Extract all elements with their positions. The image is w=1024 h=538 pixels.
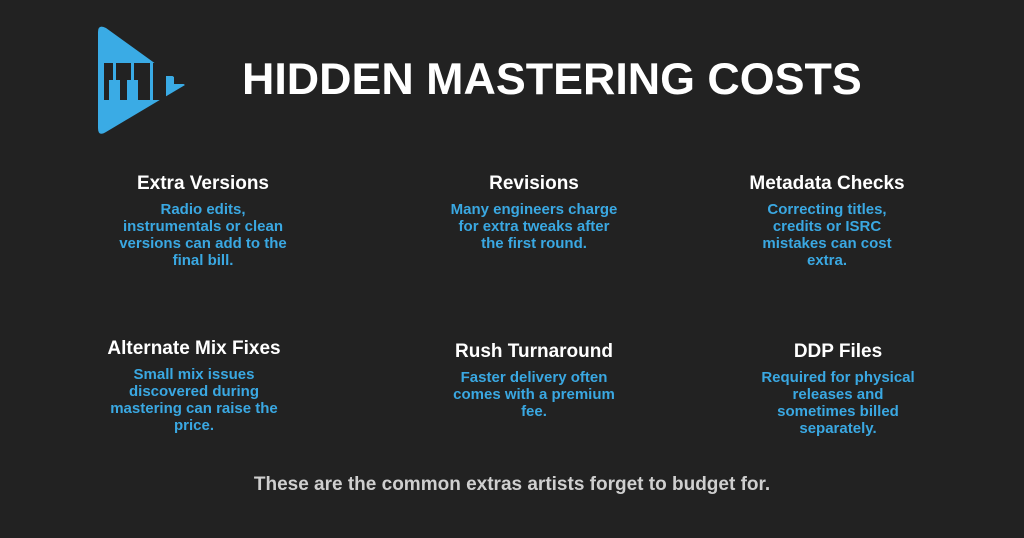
panel: alternate mix fixes: Alternate Mix Fixes <box>107 338 281 359</box>
panel: metadata checks: Correcting titles, <box>767 201 887 218</box>
panel: extra versions <box>119 173 287 269</box>
panel: ddp files <box>761 341 915 437</box>
panel: ddp files: sometimes billed <box>777 403 899 420</box>
panel: extra versions: final bill. <box>173 252 233 269</box>
panel: alternate mix fixes: mastering can raise the <box>110 400 278 417</box>
panel: rush turnaround: Faster delivery often <box>461 369 607 386</box>
panel: metadata checks <box>749 173 905 269</box>
panel: metadata checks: extra. <box>807 252 847 269</box>
panel: ddp files: releases and <box>793 386 883 403</box>
panel: revisions: Many engineers charge <box>451 201 617 218</box>
panel: extra versions: Radio edits, <box>160 201 246 218</box>
panel: alternate mix fixes: Small mix issues <box>134 366 254 383</box>
panel: rush turnaround: Rush Turnaround <box>455 341 613 362</box>
panel: metadata checks: Metadata Checks <box>749 173 905 194</box>
panel: rush turnaround: comes with a premium <box>453 386 615 403</box>
logo <box>98 26 185 134</box>
panel: revisions: for extra tweaks after <box>459 218 609 235</box>
panel: extra versions: instrumentals or clean <box>123 218 283 235</box>
panel: revisions: Revisions <box>489 173 579 194</box>
panel: alternate mix fixes: discovered during <box>129 383 259 400</box>
panel: revisions <box>451 173 617 252</box>
panel: ddp files: DDP Files <box>794 341 882 362</box>
panel: metadata checks: mistakes can cost <box>762 235 892 252</box>
panel: rush turnaround: fee. <box>521 403 547 420</box>
panel: revisions: the first round. <box>481 235 587 252</box>
panel: alternate mix fixes: price. <box>174 417 214 434</box>
panel: extra versions: Extra Versions <box>137 173 269 194</box>
panel: ddp files: Required for physical <box>761 369 915 386</box>
footer: These are the common extras artists forget to budget for. <box>254 474 770 495</box>
panel: extra versions: versions can add to the <box>119 235 287 252</box>
title: HIDDEN MASTERING COSTS <box>242 54 862 104</box>
panel: metadata checks: credits or ISRC <box>773 218 881 235</box>
panel: rush turnaround <box>453 341 615 420</box>
panel: alternate mix fixes <box>107 338 281 434</box>
panel: ddp files: separately. <box>799 420 877 437</box>
